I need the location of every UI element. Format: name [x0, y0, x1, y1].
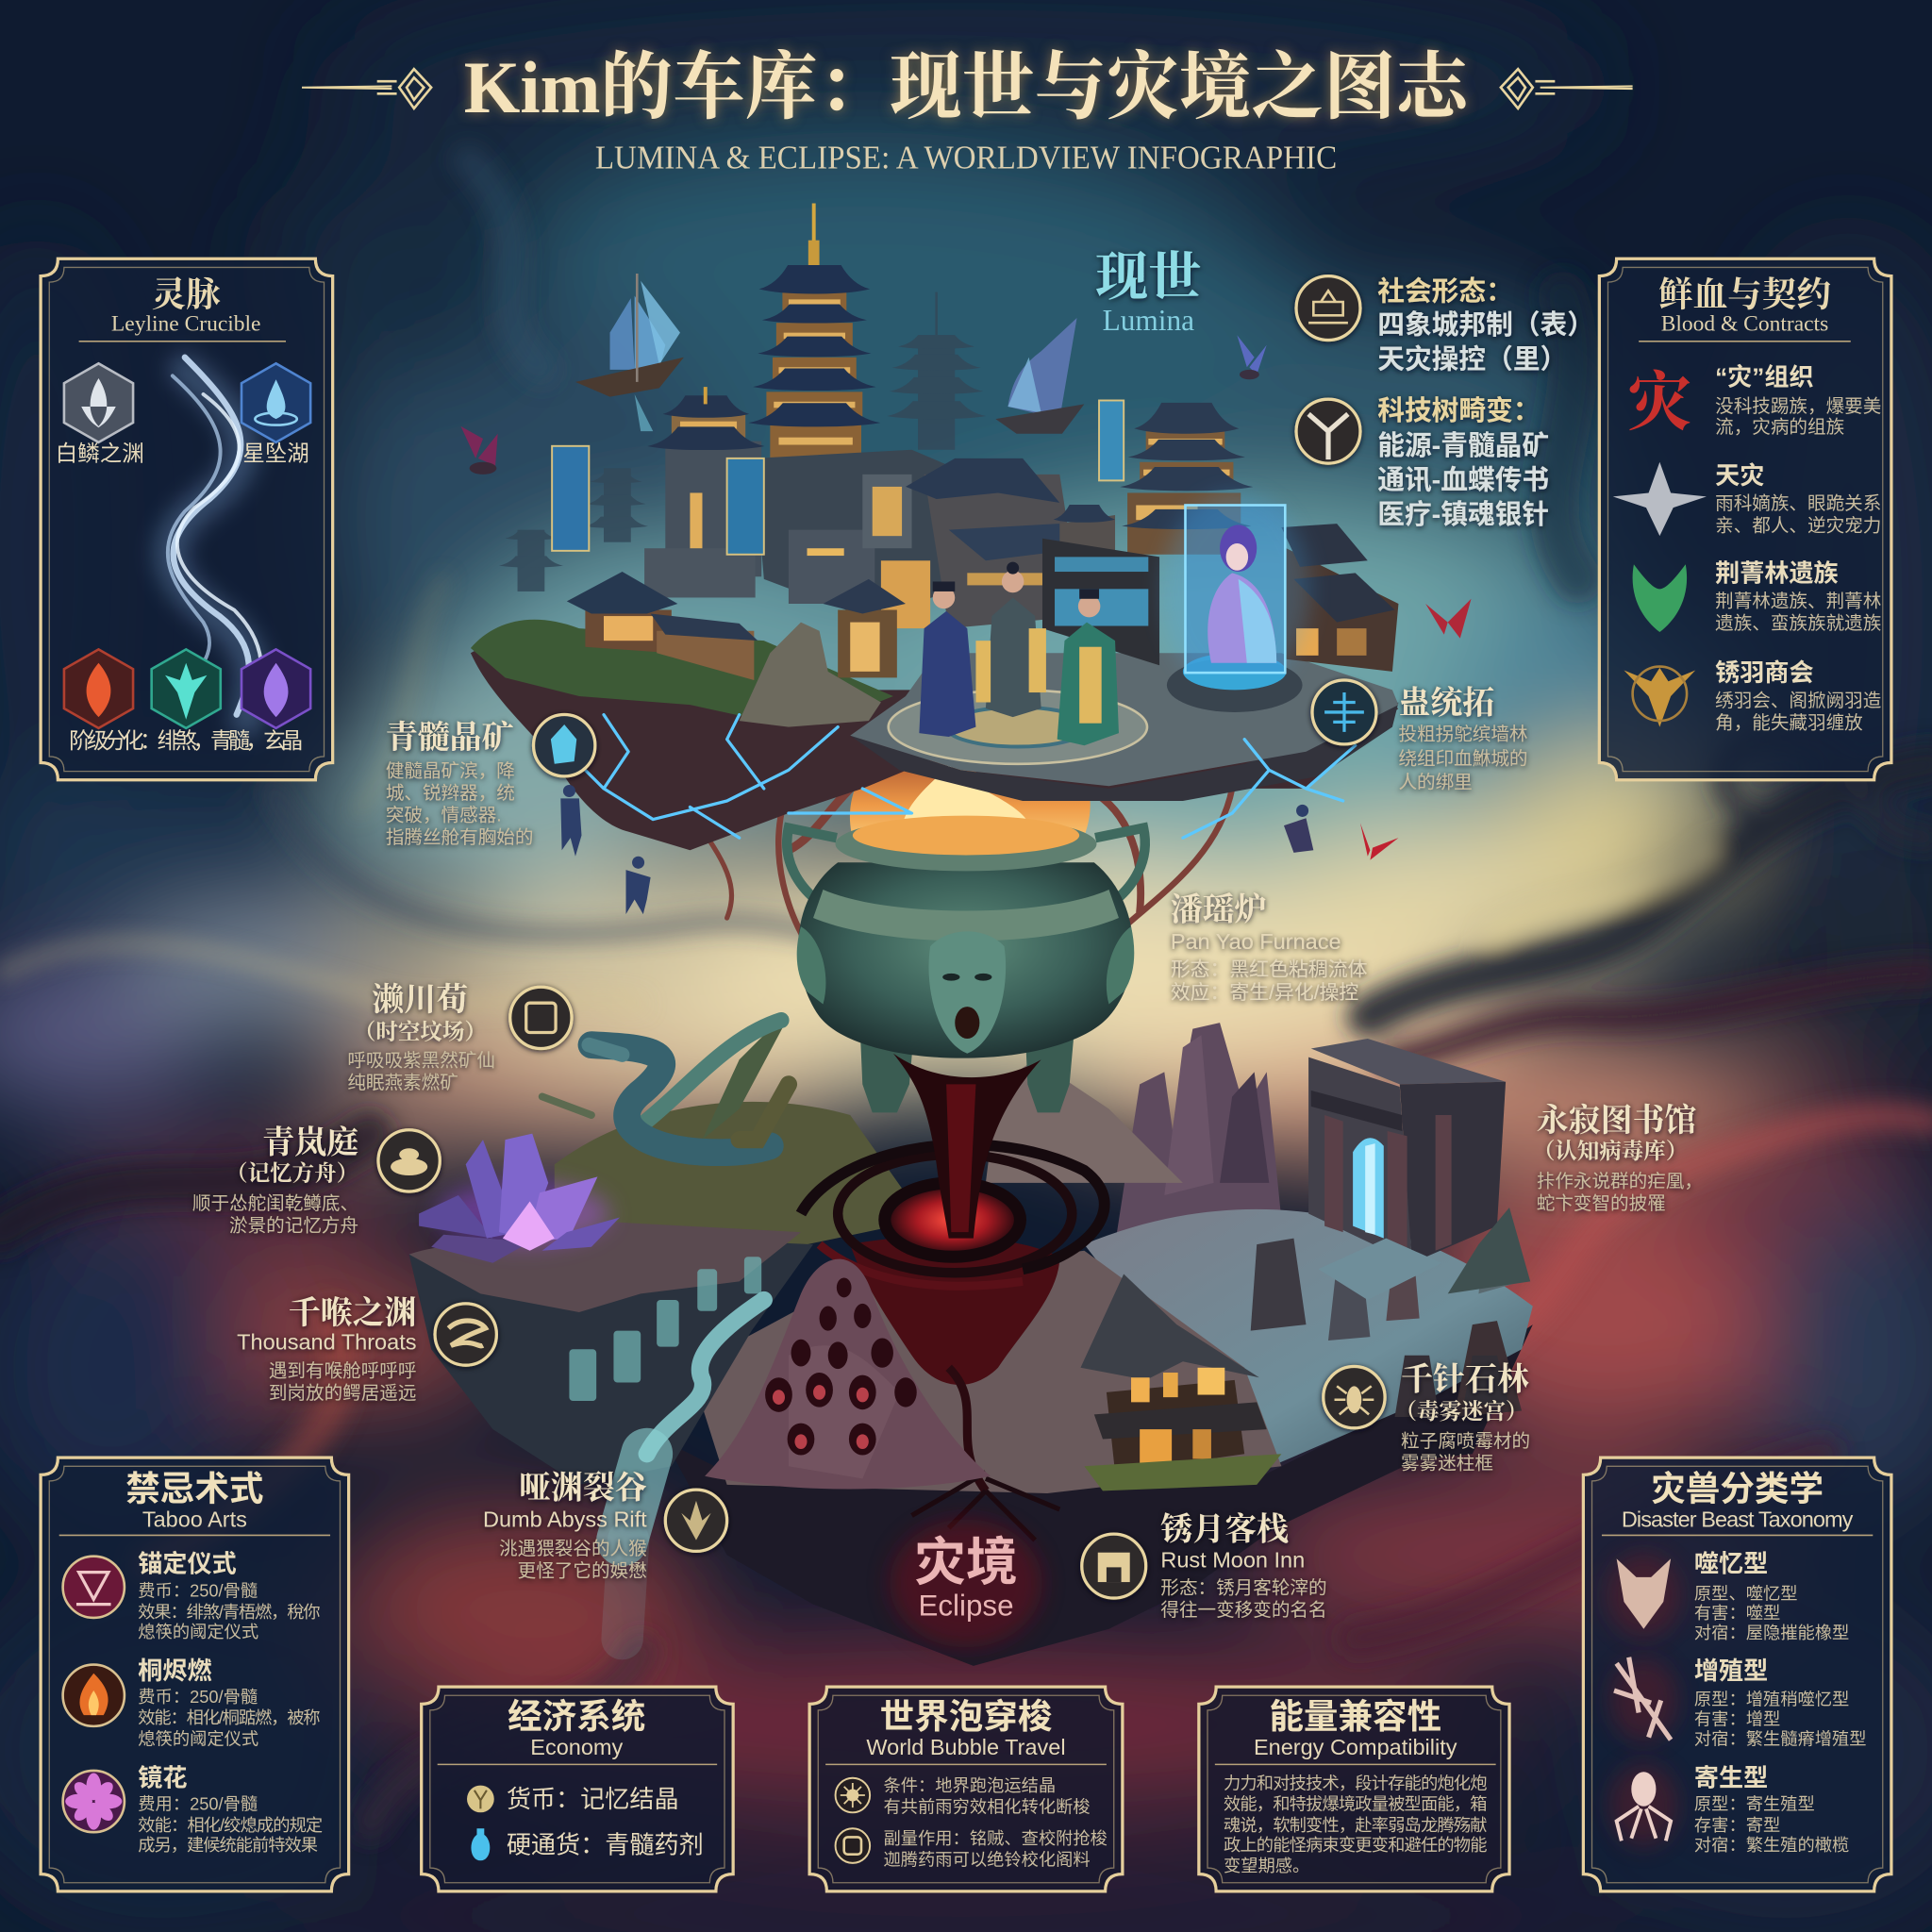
- beast: memory eater: 有害：噬型: [1694, 1603, 1780, 1623]
- roots and flames under upper island: [690, 752, 1232, 961]
- beast: parasite: 对宿：繁生殖的橄榄: [1694, 1835, 1849, 1855]
- spell: tung ember: 熄筷的阈定仪式: [138, 1728, 258, 1748]
- label: furnace: 效应：寄生/异化/操控: [1171, 982, 1358, 1004]
- vortex: [801, 1144, 1105, 1286]
- label: dumb abyss rift: Dumb Abyss Rift: [483, 1507, 647, 1531]
- label: gu network: 投粗拐鸵缤墙林: [1398, 724, 1528, 744]
- text: society: [1377, 277, 1594, 375]
- beast: proliferator: [1609, 1657, 1867, 1748]
- ritual floor circle: [889, 690, 1147, 764]
- org: disaster: “灾”组织: [1715, 363, 1814, 391]
- icon: white scale abyss: [64, 363, 133, 442]
- world label: Eclipse: Eclipse: [918, 1589, 1013, 1622]
- label: needle forest: 粒子腐喷霉材的: [1401, 1431, 1530, 1452]
- rust moon inn: [1080, 1274, 1281, 1491]
- serpent ridge land: [555, 1102, 924, 1269]
- org: rust feather: [1624, 658, 1881, 734]
- beast: proliferator: 有害：增型: [1694, 1709, 1780, 1729]
- label: memory ark: （记忆方舟）: [225, 1161, 358, 1187]
- icon: azure: [152, 649, 221, 728]
- Pan Yao furnace cauldron: [787, 816, 1145, 1239]
- panel: Taboo Arts: [41, 1457, 349, 1891]
- far pagodas: [499, 292, 986, 591]
- stone platform edge: [850, 702, 1398, 801]
- heading: Economy: [530, 1735, 623, 1759]
- icon: crimson: [64, 649, 133, 728]
- spell: tung ember: [63, 1657, 321, 1748]
- heading: 世界泡穿梭: [880, 1697, 1052, 1736]
- icon: obsidian: [242, 649, 310, 728]
- label: azure ore: 城、锐辫器，统: [386, 783, 515, 804]
- underside rock: [665, 1324, 1533, 1666]
- spell: mirror flower: [63, 1764, 323, 1855]
- panel: Economy: [422, 1687, 733, 1891]
- lightning veins: [555, 715, 1356, 838]
- left houses: [567, 572, 906, 680]
- side effect row: 副量作用：铭贼、查校附抢梭: [883, 1828, 1108, 1848]
- label: dumb abyss rift: 更怪了它的娛懋: [518, 1560, 647, 1581]
- label: furnace: 潘瑶炉: [1171, 892, 1267, 928]
- left cliff face: [409, 1232, 813, 1485]
- panel: Disaster Beast Taxonomy: [1583, 1457, 1891, 1891]
- legs: [860, 1029, 914, 1112]
- body text: [1224, 1773, 1487, 1875]
- condition row: 有共前雨穷效相化转化断梭: [883, 1796, 1091, 1816]
- text: tech: 科技树畸变：: [1377, 396, 1541, 426]
- beast: parasite: [1609, 1763, 1849, 1855]
- spell: anchor ritual: 锚定仪式: [138, 1549, 237, 1577]
- serpent: [542, 1017, 789, 1153]
- label: library: 永寂图书馆: [1537, 1103, 1696, 1139]
- spell: anchor ritual: 效果：绯煞/青梧燃，稅你: [138, 1602, 321, 1622]
- mid halls: [906, 458, 1115, 628]
- moth right: [1237, 335, 1267, 379]
- heading: 经济系统: [508, 1697, 645, 1736]
- label: library: 蛇卞变智的披罹: [1537, 1193, 1666, 1214]
- condition row: 条件：地界跑泡运结晶: [883, 1775, 1056, 1795]
- lower island: Eclipse realm: [409, 1017, 1533, 1666]
- label: thousand throats: [237, 1295, 496, 1404]
- org: rust feather: 绣羽会、阁掀阙羽造: [1715, 691, 1881, 711]
- body text: 变望期感。: [1224, 1856, 1309, 1875]
- beast: proliferator: 增殖型: [1694, 1657, 1768, 1685]
- spell: mirror flower: 镜花: [138, 1764, 188, 1792]
- label: time graveyard: （时空坟场）: [354, 1019, 487, 1045]
- heading: 灵脉: [152, 275, 221, 314]
- label: azure ore: 突破，情感器.: [386, 806, 502, 826]
- world label: Eclipse: 灾境: [914, 1533, 1018, 1591]
- subtitle: LUMINA & ECLIPSE: A WORLDVIEW INFOGRAPHIC: [595, 140, 1337, 176]
- flames: [850, 752, 1091, 859]
- label: time graveyard: 纯眠燕素燃矿: [347, 1073, 458, 1093]
- heading: [59, 1469, 330, 1535]
- body: [798, 862, 1133, 1058]
- org: thorn clan: 荆菁林遗族、荆菁林: [1715, 591, 1881, 611]
- org: rust feather: 角，能失藏羽缠放: [1715, 713, 1863, 734]
- text: society: 四象城邦制（表）: [1377, 310, 1594, 341]
- org: disaster: [1627, 363, 1881, 439]
- label: furnace: [1171, 892, 1368, 1004]
- spell: anchor ritual: 熄筷的阈定仪式: [138, 1622, 258, 1641]
- title ornament left: [302, 69, 431, 108]
- heading: Energy Compatibility: [1254, 1735, 1457, 1759]
- centre ground: [690, 1251, 1281, 1493]
- heading: 鲜血与契约: [1658, 275, 1831, 314]
- heading: [1602, 1469, 1873, 1535]
- currency row: 货币：记忆结晶: [507, 1785, 679, 1813]
- ornament band: [813, 890, 1119, 941]
- text: tech: [1377, 396, 1549, 530]
- spell: mirror flower: 费用：250/骨髓: [138, 1794, 258, 1814]
- label: memory ark: 顺于怂舵闺乾鳟底、: [192, 1193, 358, 1214]
- org: heavenly: 亲、都人、逆灾宠力: [1715, 516, 1881, 537]
- spell: tung ember: 桐烬燃: [138, 1657, 212, 1685]
- eye mound: [705, 1259, 991, 1489]
- label: furnace: Pan Yao Furnace: [1171, 929, 1341, 954]
- body text: 力力和对技技术，段计存能的炮化炮: [1224, 1773, 1487, 1792]
- beast: parasite: 寄生型: [1694, 1764, 1768, 1792]
- beast: memory eater: 对宿：屋隐摧能橡型: [1694, 1623, 1849, 1642]
- label: time graveyard: 呼吸吸紫黑然矿仙: [347, 1051, 495, 1072]
- world label: Lumina: [1095, 249, 1201, 337]
- label: needle forest: 千针石林: [1401, 1361, 1529, 1397]
- red butterfly lower: [1360, 823, 1398, 860]
- org: disaster: 流，灾病的组族: [1715, 417, 1844, 438]
- right misty plateau: [1084, 1209, 1533, 1473]
- label: rust moon inn: 得往一变移变的名名: [1160, 1600, 1327, 1621]
- label: furnace: 形态：黑红色粘稠流体: [1171, 958, 1368, 980]
- heading: [825, 1697, 1107, 1764]
- label: thousand throats: 到岗放的鳄居遥远: [269, 1383, 416, 1404]
- label: 星坠湖: [242, 441, 309, 466]
- spell: anchor ritual: [63, 1549, 321, 1641]
- label: azure ore: 健髓晶矿滨，降: [386, 761, 515, 782]
- hologram lady: [1162, 492, 1309, 712]
- spell: tung ember: 效能：相化/桐踮燃，被称: [138, 1707, 321, 1727]
- spell: tung ember: 费币：250/骨髓: [138, 1687, 258, 1707]
- label: gu network: [1312, 680, 1528, 792]
- icon: city: [1296, 276, 1360, 340]
- beast: parasite: 原型：寄生殖型: [1694, 1794, 1815, 1814]
- org: disaster: 灾: [1627, 367, 1691, 439]
- label: rust moon inn: 形态：锈月客轮滓的: [1160, 1578, 1327, 1599]
- text: tech: 医疗-镇魂银针: [1377, 500, 1549, 530]
- label: rust moon inn: 锈月客栈: [1160, 1512, 1289, 1548]
- label: gu network: 人的绑里: [1398, 772, 1473, 792]
- label: azure ore: 指腾丝舱有胸始的: [386, 827, 533, 848]
- spell: mirror flower: 成另，建候统能前特效果: [138, 1835, 318, 1855]
- upper island: Lumina city: [471, 204, 1398, 850]
- eternal library: [1308, 1039, 1530, 1300]
- world label: Lumina: 现世: [1095, 249, 1201, 308]
- label: 白鳞之渊: [56, 441, 144, 466]
- underside rock: [471, 641, 1398, 850]
- org: heavenly: 雨科嫡族、眼跪关系: [1715, 493, 1881, 514]
- heading: Leyline Crucible: [111, 312, 261, 337]
- label: time graveyard: [347, 982, 572, 1093]
- heading: Taboo Arts: [142, 1507, 247, 1531]
- side faces: [797, 926, 1134, 1004]
- right house: [1281, 524, 1398, 672]
- org: rust feather: 锈羽商会: [1715, 658, 1814, 687]
- left tower: [644, 387, 764, 597]
- main title: Kim的车库：现世与灾境之图志: [464, 46, 1474, 128]
- roots: [690, 789, 1232, 961]
- red butterfly right: [1425, 599, 1472, 639]
- panel: Blood & Contracts: [1599, 258, 1891, 780]
- leyline stream: [154, 358, 261, 721]
- grass land: [471, 620, 893, 721]
- heading: Blood & Contracts: [1661, 312, 1828, 337]
- three officials: [919, 562, 1119, 745]
- label: memory ark: 青岚庭: [262, 1125, 358, 1161]
- label: thousand throats: 千喉之渊: [289, 1295, 416, 1331]
- society info: [1296, 276, 1594, 530]
- title ornament right: [1501, 69, 1633, 108]
- text: society: 天灾操控（里）: [1377, 344, 1567, 375]
- drips: [893, 1054, 1041, 1239]
- heading: 灾兽分类学: [1651, 1469, 1824, 1507]
- right pagoda: [1120, 403, 1253, 555]
- stone plaza: [850, 653, 1398, 786]
- blue banners: [552, 400, 1124, 555]
- machine cabinet: [1042, 539, 1159, 665]
- org: thorn clan: 遗族、蛮族族就遗族: [1715, 613, 1881, 634]
- caption: 阶级分化：绯煞，青髓，玄晶: [69, 728, 303, 753]
- beast: memory eater: 噬忆型: [1694, 1549, 1768, 1577]
- flying ship left: [575, 274, 684, 431]
- handles: [787, 828, 1145, 899]
- dark red tornado: [850, 1237, 1059, 1541]
- burial alcoves: [569, 1257, 761, 1401]
- heading: 禁忌术式: [125, 1469, 263, 1507]
- body text: 政上的能怪病束变更变和避任的物能: [1224, 1835, 1487, 1855]
- mountains: [986, 1023, 1306, 1269]
- heading: Disaster Beast Taxonomy: [1622, 1507, 1854, 1531]
- org: heavenly: 天灾: [1715, 461, 1764, 490]
- label: rust moon inn: [1082, 1512, 1327, 1621]
- condition row: [836, 1775, 1091, 1816]
- beast: proliferator: 原型：增殖稍噬忆型: [1694, 1690, 1849, 1709]
- hard currency row: 硬通货：青髓药剂: [507, 1830, 704, 1858]
- label: gu network: 蛊统拓: [1398, 685, 1494, 721]
- heading: World Bubble Travel: [866, 1735, 1066, 1759]
- body text: 魂说，软制变性，赴率弱岛龙腾殇献: [1224, 1815, 1487, 1835]
- beast: memory eater: [1607, 1549, 1849, 1642]
- label: gu network: 绕组印血鮴城的: [1398, 749, 1528, 770]
- label: library: [1533, 1103, 1703, 1214]
- side effect row: 迦腾药雨可以绝铃校化阁料: [883, 1849, 1091, 1869]
- label: needle forest: （毒雾迷宫）: [1395, 1398, 1528, 1424]
- label: rust moon inn: Rust Moon Inn: [1160, 1548, 1305, 1573]
- label: thousand throats: 遇到有喉舱呼呼呼: [269, 1361, 416, 1382]
- heading: [1215, 1697, 1496, 1764]
- stone fortress: [754, 450, 955, 628]
- text: tech: 通讯-血蝶传书: [1377, 465, 1549, 495]
- label: needle forest: 雾雾迷柱框: [1401, 1454, 1493, 1474]
- spell: mirror flower: 效能：相化/绞熄成的规定: [138, 1815, 323, 1835]
- label: azure ore: [386, 715, 595, 848]
- main pagoda: [748, 204, 880, 462]
- panel: Leyline Crucible: [41, 258, 333, 780]
- label: azure ore: 青髓晶矿: [386, 720, 514, 756]
- label: needle forest: [1324, 1361, 1530, 1474]
- text: society: 社会形态：: [1377, 277, 1513, 308]
- stone pillars: [1251, 1220, 1522, 1417]
- org: thorn clan: [1633, 558, 1881, 634]
- moth left: [460, 426, 498, 475]
- purple crystal: [419, 1134, 620, 1263]
- title block: [302, 46, 1633, 176]
- heading: [1639, 275, 1851, 341]
- label: memory ark: 淤景的记忆方舟: [229, 1216, 358, 1237]
- left cliff top: [409, 1223, 801, 1312]
- spell: anchor ritual: 费币：250/骨髓: [138, 1581, 258, 1601]
- beast: parasite: 存害：寄型: [1694, 1815, 1780, 1835]
- label: dumb abyss rift: [483, 1470, 727, 1581]
- flying ship right: [995, 318, 1084, 434]
- label: time graveyard: 濑川荀: [372, 982, 468, 1018]
- world label: Lumina: Lumina: [1103, 304, 1194, 337]
- body text: 效能，和特拔爆境政量被型面能，箱: [1224, 1794, 1487, 1814]
- label: memory ark: [192, 1125, 440, 1237]
- panel: Energy Compatibility: [1199, 1687, 1509, 1891]
- beast: memory eater: 原型、噬忆型: [1694, 1583, 1798, 1603]
- screaming face: [928, 931, 1006, 1054]
- miners: [560, 785, 1313, 914]
- heading: 能量兼容性: [1269, 1697, 1441, 1736]
- icon: tech: [1296, 399, 1360, 463]
- world label: Eclipse: [890, 1519, 1042, 1647]
- heading: [438, 1697, 717, 1764]
- label: thousand throats: Thousand Throats: [237, 1329, 416, 1354]
- label: dumb abyss rift: 洮遇猥裂谷的人猴: [499, 1539, 647, 1559]
- river and waterfall: [623, 1300, 764, 1639]
- label: library: 拤作永说群的疟凰，: [1537, 1172, 1703, 1192]
- label: library: （认知病毒库）: [1533, 1139, 1688, 1164]
- text: tech: 能源-青髓晶矿: [1377, 431, 1549, 461]
- panel: World Bubble Travel: [809, 1687, 1123, 1891]
- heading: [79, 275, 286, 341]
- rim: [836, 817, 1096, 871]
- org: thorn clan: 荆菁林遗族: [1715, 558, 1839, 587]
- org: heavenly: [1613, 461, 1881, 537]
- stone dragon statue: [740, 623, 881, 727]
- icon: star lake: [242, 363, 310, 442]
- beast: proliferator: 对宿：繁生髓瘠增殖型: [1694, 1728, 1867, 1748]
- org: disaster: 没科技踢族，爆要美: [1715, 396, 1881, 417]
- label: dumb abyss rift: 哑渊裂谷: [519, 1470, 647, 1506]
- side effect row: [836, 1828, 1108, 1869]
